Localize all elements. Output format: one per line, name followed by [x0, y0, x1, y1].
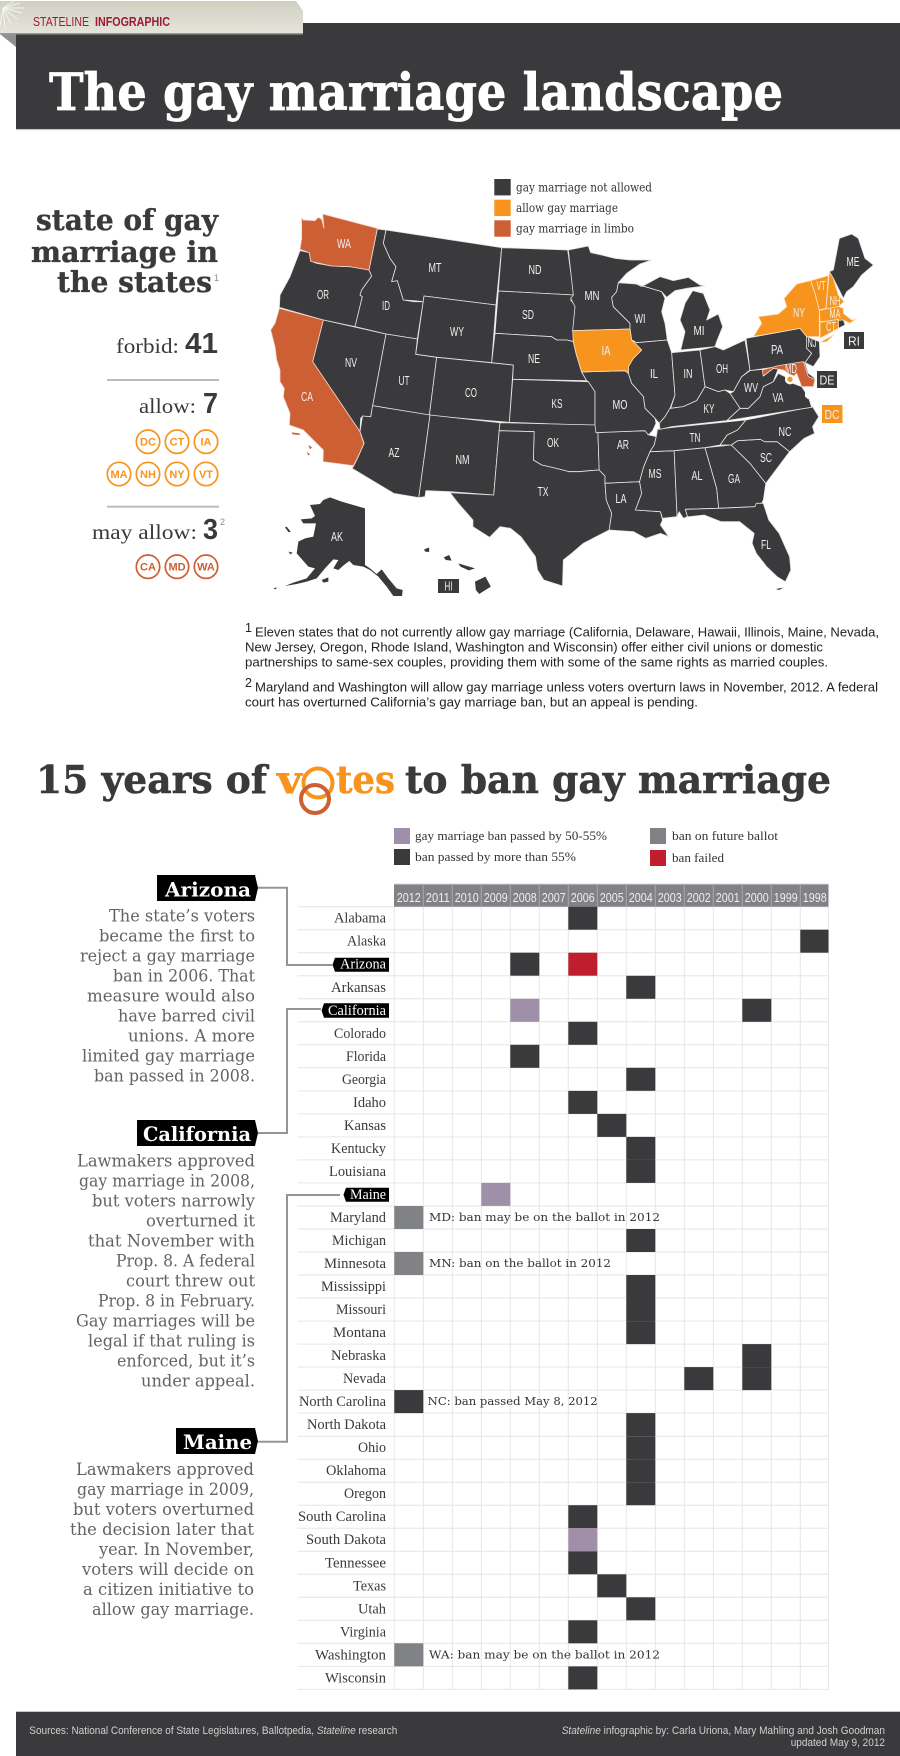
state labels: NJ	[808, 335, 816, 350]
tab label	[33, 15, 170, 29]
state labels: SC	[760, 450, 772, 465]
footer: updated May 9, 2012	[791, 1737, 885, 1749]
callout text: gay marriage in 2008,	[79, 1172, 255, 1191]
callout text: gay marriage in 2009,	[77, 1480, 254, 1499]
state labels: VT	[816, 278, 826, 293]
chart: votes by state and year	[298, 884, 828, 1689]
callout text: ban passed in 2008.	[94, 1067, 255, 1086]
state labels: ID	[382, 298, 390, 313]
callout text: legal if that ruling is	[88, 1332, 255, 1351]
state labels: OR	[317, 287, 329, 302]
callout text	[80, 907, 255, 1086]
stat: may allow	[92, 514, 225, 546]
footnotes: partnerships to same-sex couples, providing them with some of the same rights as married couples.	[245, 656, 828, 670]
callout text: the decision later that	[70, 1520, 254, 1539]
year header: 1998	[803, 891, 827, 905]
callout text: Lawmakers approved	[77, 1152, 255, 1171]
section title: 15 years of votes: tes	[336, 757, 395, 802]
header band	[16, 23, 900, 130]
callout text: overturned it	[146, 1212, 255, 1231]
callout: Maine	[70, 1428, 258, 1619]
year header: 2001	[716, 891, 740, 905]
state rows: Montana	[333, 1325, 387, 1341]
state labels: NY	[793, 305, 805, 320]
year header: 2008	[513, 891, 537, 905]
label box: Rhode Island: RI	[848, 334, 860, 348]
badges: allow states: NY	[169, 469, 185, 481]
connector: Maine	[258, 1195, 340, 1442]
state rows: Ohio	[358, 1440, 386, 1456]
section title: 15 years of votes: 15 years of	[36, 757, 270, 802]
year header: 2003	[658, 891, 682, 905]
footer	[16, 1712, 900, 1756]
state rows: Kentucky	[331, 1141, 387, 1157]
state labels: IN	[684, 366, 692, 381]
state: Vermont	[811, 276, 828, 310]
state labels: SD	[522, 307, 534, 322]
chart legend: ban failed	[672, 850, 724, 865]
callout text: year. In November,	[98, 1540, 254, 1559]
callout text: limited gay marriage	[82, 1047, 255, 1066]
state: California	[271, 308, 364, 466]
state rows: Missouri	[336, 1302, 386, 1318]
footnotes: 2	[245, 676, 252, 690]
highlighted row tag: Arizona: Arizona	[340, 957, 387, 973]
state: New York	[753, 281, 819, 337]
callout text: a citizen initiative to	[83, 1580, 254, 1599]
callout text: have barred civil	[118, 1007, 255, 1026]
label box: Delaware: DE	[820, 372, 835, 388]
state labels: MA	[830, 306, 841, 321]
state rows: Louisiana	[329, 1164, 387, 1180]
year header: 2000	[745, 891, 769, 905]
callout text: unions. A more	[128, 1027, 255, 1046]
chart legend: gay marriage ban passed by 50-55%	[415, 828, 607, 843]
state rows: Nebraska	[331, 1348, 387, 1364]
state labels: AR	[617, 437, 629, 452]
stat: allow: 7	[203, 388, 218, 420]
callout text: allow gay marriage.	[92, 1600, 254, 1619]
callout text: Lawmakers approved	[76, 1460, 254, 1479]
state labels: VA	[772, 390, 784, 405]
callout tag: Maine	[183, 1430, 252, 1454]
state labels: AZ	[388, 445, 400, 460]
footnotes: Eleven states that do not currently allow gay marriage (California, Delaware, Hawaii, Illinois, Maine, Nevada,	[255, 626, 879, 640]
footnotes: 1	[245, 621, 252, 635]
state rows: Texas	[353, 1578, 386, 1594]
state labels: WV	[744, 380, 758, 395]
map legend: gay marriage in limbo	[516, 221, 634, 236]
callout text: ban in 2006. That	[113, 967, 255, 986]
year header: 2007	[542, 891, 566, 905]
state rows: North Dakota	[307, 1417, 387, 1433]
callout text: became the first to	[99, 927, 255, 946]
state rows: Oregon	[344, 1486, 387, 1502]
state labels: FL	[761, 537, 771, 552]
footnotes	[245, 621, 879, 710]
us map	[271, 214, 873, 596]
callout text: enforced, but it’s	[117, 1352, 255, 1371]
callout text: reject a gay marriage	[80, 947, 255, 966]
map legend: allow gay marriage	[516, 200, 618, 215]
map legend: gay marriage not allowed	[516, 180, 652, 194]
callout text: under appeal.	[141, 1372, 255, 1391]
state: Maryland	[762, 362, 815, 387]
label box: Hawaii	[438, 578, 459, 594]
stat: may allow: 3	[203, 514, 218, 546]
callout text: but voters overturned	[73, 1500, 254, 1519]
state rows: Minnesota	[324, 1256, 387, 1272]
callout text: measure would also	[87, 987, 255, 1006]
panel: state tally	[31, 203, 225, 578]
state rows: Virginia	[340, 1624, 387, 1640]
badges: allow states	[107, 430, 218, 486]
highlighted row tag: California: California	[328, 1003, 387, 1019]
eastern states	[568, 234, 873, 435]
year header: 2009	[484, 891, 508, 905]
callout text: Gay marriages will be	[76, 1312, 255, 1331]
label box: District of Columbia: DC	[824, 407, 840, 422]
state rows: Tennessee	[325, 1555, 386, 1571]
state: Iowa	[573, 329, 642, 373]
year header: 2011	[426, 891, 450, 905]
stat: allow	[139, 388, 218, 420]
badges: allow states: NH	[140, 469, 156, 481]
map legend	[494, 179, 652, 237]
state rows: North Carolina	[299, 1394, 387, 1410]
state labels: MS	[648, 466, 662, 481]
state labels: AK	[331, 529, 343, 544]
state rows: Oklahoma	[326, 1463, 387, 1479]
state labels: CO	[465, 385, 477, 400]
main title: The gay marriage landscape	[49, 63, 783, 123]
state labels: GA	[728, 471, 740, 486]
year header: 2005	[600, 891, 624, 905]
callout: California	[76, 1120, 258, 1391]
state rows: Wisconsin	[325, 1670, 387, 1686]
year header	[394, 884, 828, 907]
label box: Hawaii: HI	[444, 578, 452, 594]
heading: state of gay marriage in the states: marriage in	[31, 235, 218, 269]
state labels: CA	[301, 389, 313, 404]
year header: 2012	[397, 891, 421, 905]
callout text	[70, 1460, 254, 1619]
badges: allow states: CT	[170, 437, 185, 449]
year header: 2004	[629, 891, 653, 905]
state rows: Arkansas	[331, 980, 386, 996]
state labels: NV	[345, 355, 357, 370]
state rows: Idaho	[353, 1095, 386, 1111]
badges: allow states: DC	[140, 437, 156, 449]
callout text: Prop. 8 in February.	[98, 1292, 255, 1311]
section title: 15 years of votes	[36, 757, 831, 813]
state labels: LA	[616, 491, 627, 506]
callout tag: Arizona	[164, 878, 251, 902]
heading: state of gay marriage in the states	[31, 203, 219, 299]
state labels: ME	[846, 254, 860, 269]
state labels: AL	[692, 468, 702, 483]
state: Massachusetts	[819, 307, 857, 323]
state labels: NM	[456, 452, 470, 467]
state labels: WA	[337, 236, 351, 251]
year header: 2002	[687, 891, 711, 905]
state labels: NE	[528, 351, 540, 366]
icon: interlocked rings	[301, 768, 332, 813]
badges: may allow states: WA	[197, 562, 215, 574]
state labels: MD	[785, 361, 797, 376]
stateline tab	[0, 1, 303, 47]
state labels: IL	[650, 366, 658, 381]
year header: 2010	[455, 891, 479, 905]
callout text: The state’s voters	[109, 907, 255, 926]
state rows: Colorado	[334, 1026, 386, 1042]
state rows: Michigan	[332, 1233, 387, 1249]
state rows: South Dakota	[306, 1532, 387, 1548]
state labels: MT	[428, 260, 442, 275]
year header: 1999	[774, 891, 798, 905]
state labels: KS	[552, 396, 563, 411]
label box: Rhode Island	[844, 332, 864, 349]
state: New Hampshire	[826, 272, 844, 309]
chart legend: ban on future ballot	[672, 828, 778, 843]
badges: may allow states: MD	[168, 562, 186, 574]
badges: may allow states	[136, 555, 218, 578]
callout text	[76, 1152, 256, 1391]
state labels: CT	[826, 319, 836, 334]
western states	[271, 214, 595, 466]
row notes: WA: ban may be on the ballot in 2012	[429, 1648, 660, 1662]
state rows: South Carolina	[298, 1509, 387, 1525]
footnotes: New Jersey, Oregon, Rhode Island, Washington and Wisconsin) offer either civil unions or domestic	[245, 641, 823, 655]
badges: allow states: MA	[110, 469, 128, 481]
callout text: but voters narrowly	[92, 1192, 256, 1211]
footnotes: Maryland and Washington will allow gay marriage unless voters overturn laws in November, 2012. A federal	[255, 681, 878, 695]
state labels: WY	[450, 324, 464, 339]
heading: state of gay marriage in the states: state of gay	[36, 203, 219, 237]
year header: 2006	[571, 891, 595, 905]
state labels: MN	[584, 288, 600, 303]
state rows: Georgia	[342, 1072, 387, 1088]
state rows: Mississippi	[321, 1279, 386, 1295]
state labels: MO	[612, 397, 628, 412]
state rows: Kansas	[344, 1118, 386, 1134]
callout text: that November with	[88, 1232, 255, 1251]
section title: 15 years of votes: v	[276, 757, 304, 802]
highlighted row tag: Maine: Maine	[350, 1187, 386, 1203]
state rows: Florida	[346, 1049, 387, 1065]
chart legend: ban passed by more than 55%	[415, 849, 576, 864]
state labels: OH	[716, 361, 728, 376]
southern states	[352, 406, 819, 594]
state rows: Maryland	[330, 1210, 387, 1226]
state rows: Alabama	[334, 911, 387, 927]
state labels: OK	[547, 435, 559, 450]
badges: allow states: IA	[200, 437, 212, 449]
callout text: Prop. 8. A federal	[116, 1252, 255, 1271]
row notes: MN: ban on the ballot in 2012	[429, 1256, 611, 1270]
connector: California	[258, 1009, 321, 1133]
state: Connecticut	[820, 319, 838, 338]
state labels: TN	[690, 430, 700, 445]
tab label: INFOGRAPHIC	[95, 15, 170, 29]
state rows: Utah	[358, 1601, 387, 1617]
callout: Arizona	[80, 875, 258, 1086]
badges: may allow states: CA	[140, 562, 156, 574]
callout text: voters will decide on	[81, 1560, 254, 1579]
state labels: KY	[704, 401, 715, 416]
marker: DC star	[785, 374, 795, 384]
state labels	[301, 236, 864, 594]
section title: 15 years of votes: to ban gay marriage	[405, 757, 831, 802]
stat: may allow: may allow:	[92, 520, 197, 544]
sources: Sources: National Conference of State Legislatures, Ballotpedia, Stateline research	[29, 1725, 397, 1737]
stat: forbid: 41	[185, 328, 218, 360]
heading: state of gay marriage in the states: 1	[214, 273, 219, 283]
state labels: MI	[694, 323, 704, 338]
state: Hawaii	[475, 577, 491, 594]
row notes: MD: ban may be on the ballot in 2012	[429, 1210, 660, 1224]
chart legend	[394, 828, 778, 866]
state labels: NH	[830, 293, 840, 308]
state: Alaska	[273, 497, 403, 596]
state rows: Nevada	[343, 1371, 387, 1387]
state rows	[298, 907, 828, 1689]
footnotes: court has overturned California’s gay marriage ban, but an appeal is pending.	[245, 696, 698, 710]
stat: may allow: 2	[220, 517, 225, 527]
stat: allow: allow:	[139, 394, 196, 418]
state labels: PA	[771, 342, 783, 357]
heading: state of gay marriage in the states: the states	[57, 265, 212, 299]
state labels: WI	[634, 311, 646, 326]
state rows: Alaska	[347, 934, 387, 950]
state: Washington	[300, 214, 377, 270]
callout text: court threw out	[126, 1272, 255, 1291]
stat: forbid: forbid:	[116, 334, 179, 358]
state labels: TX	[538, 484, 549, 499]
state labels: UT	[398, 373, 410, 388]
state labels: IA	[602, 343, 611, 358]
row notes: NC: ban passed May 8, 2012	[428, 1394, 598, 1408]
state labels: ND	[528, 262, 542, 277]
row notes	[428, 1210, 660, 1662]
connector: Arizona	[258, 888, 333, 965]
callout tag: California	[143, 1122, 251, 1146]
badges: allow states: VT	[199, 469, 213, 481]
tab label: STATELINE	[33, 15, 89, 29]
state rows: Washington	[315, 1647, 387, 1663]
stat: forbid	[116, 328, 218, 360]
state labels: NC	[778, 424, 792, 439]
